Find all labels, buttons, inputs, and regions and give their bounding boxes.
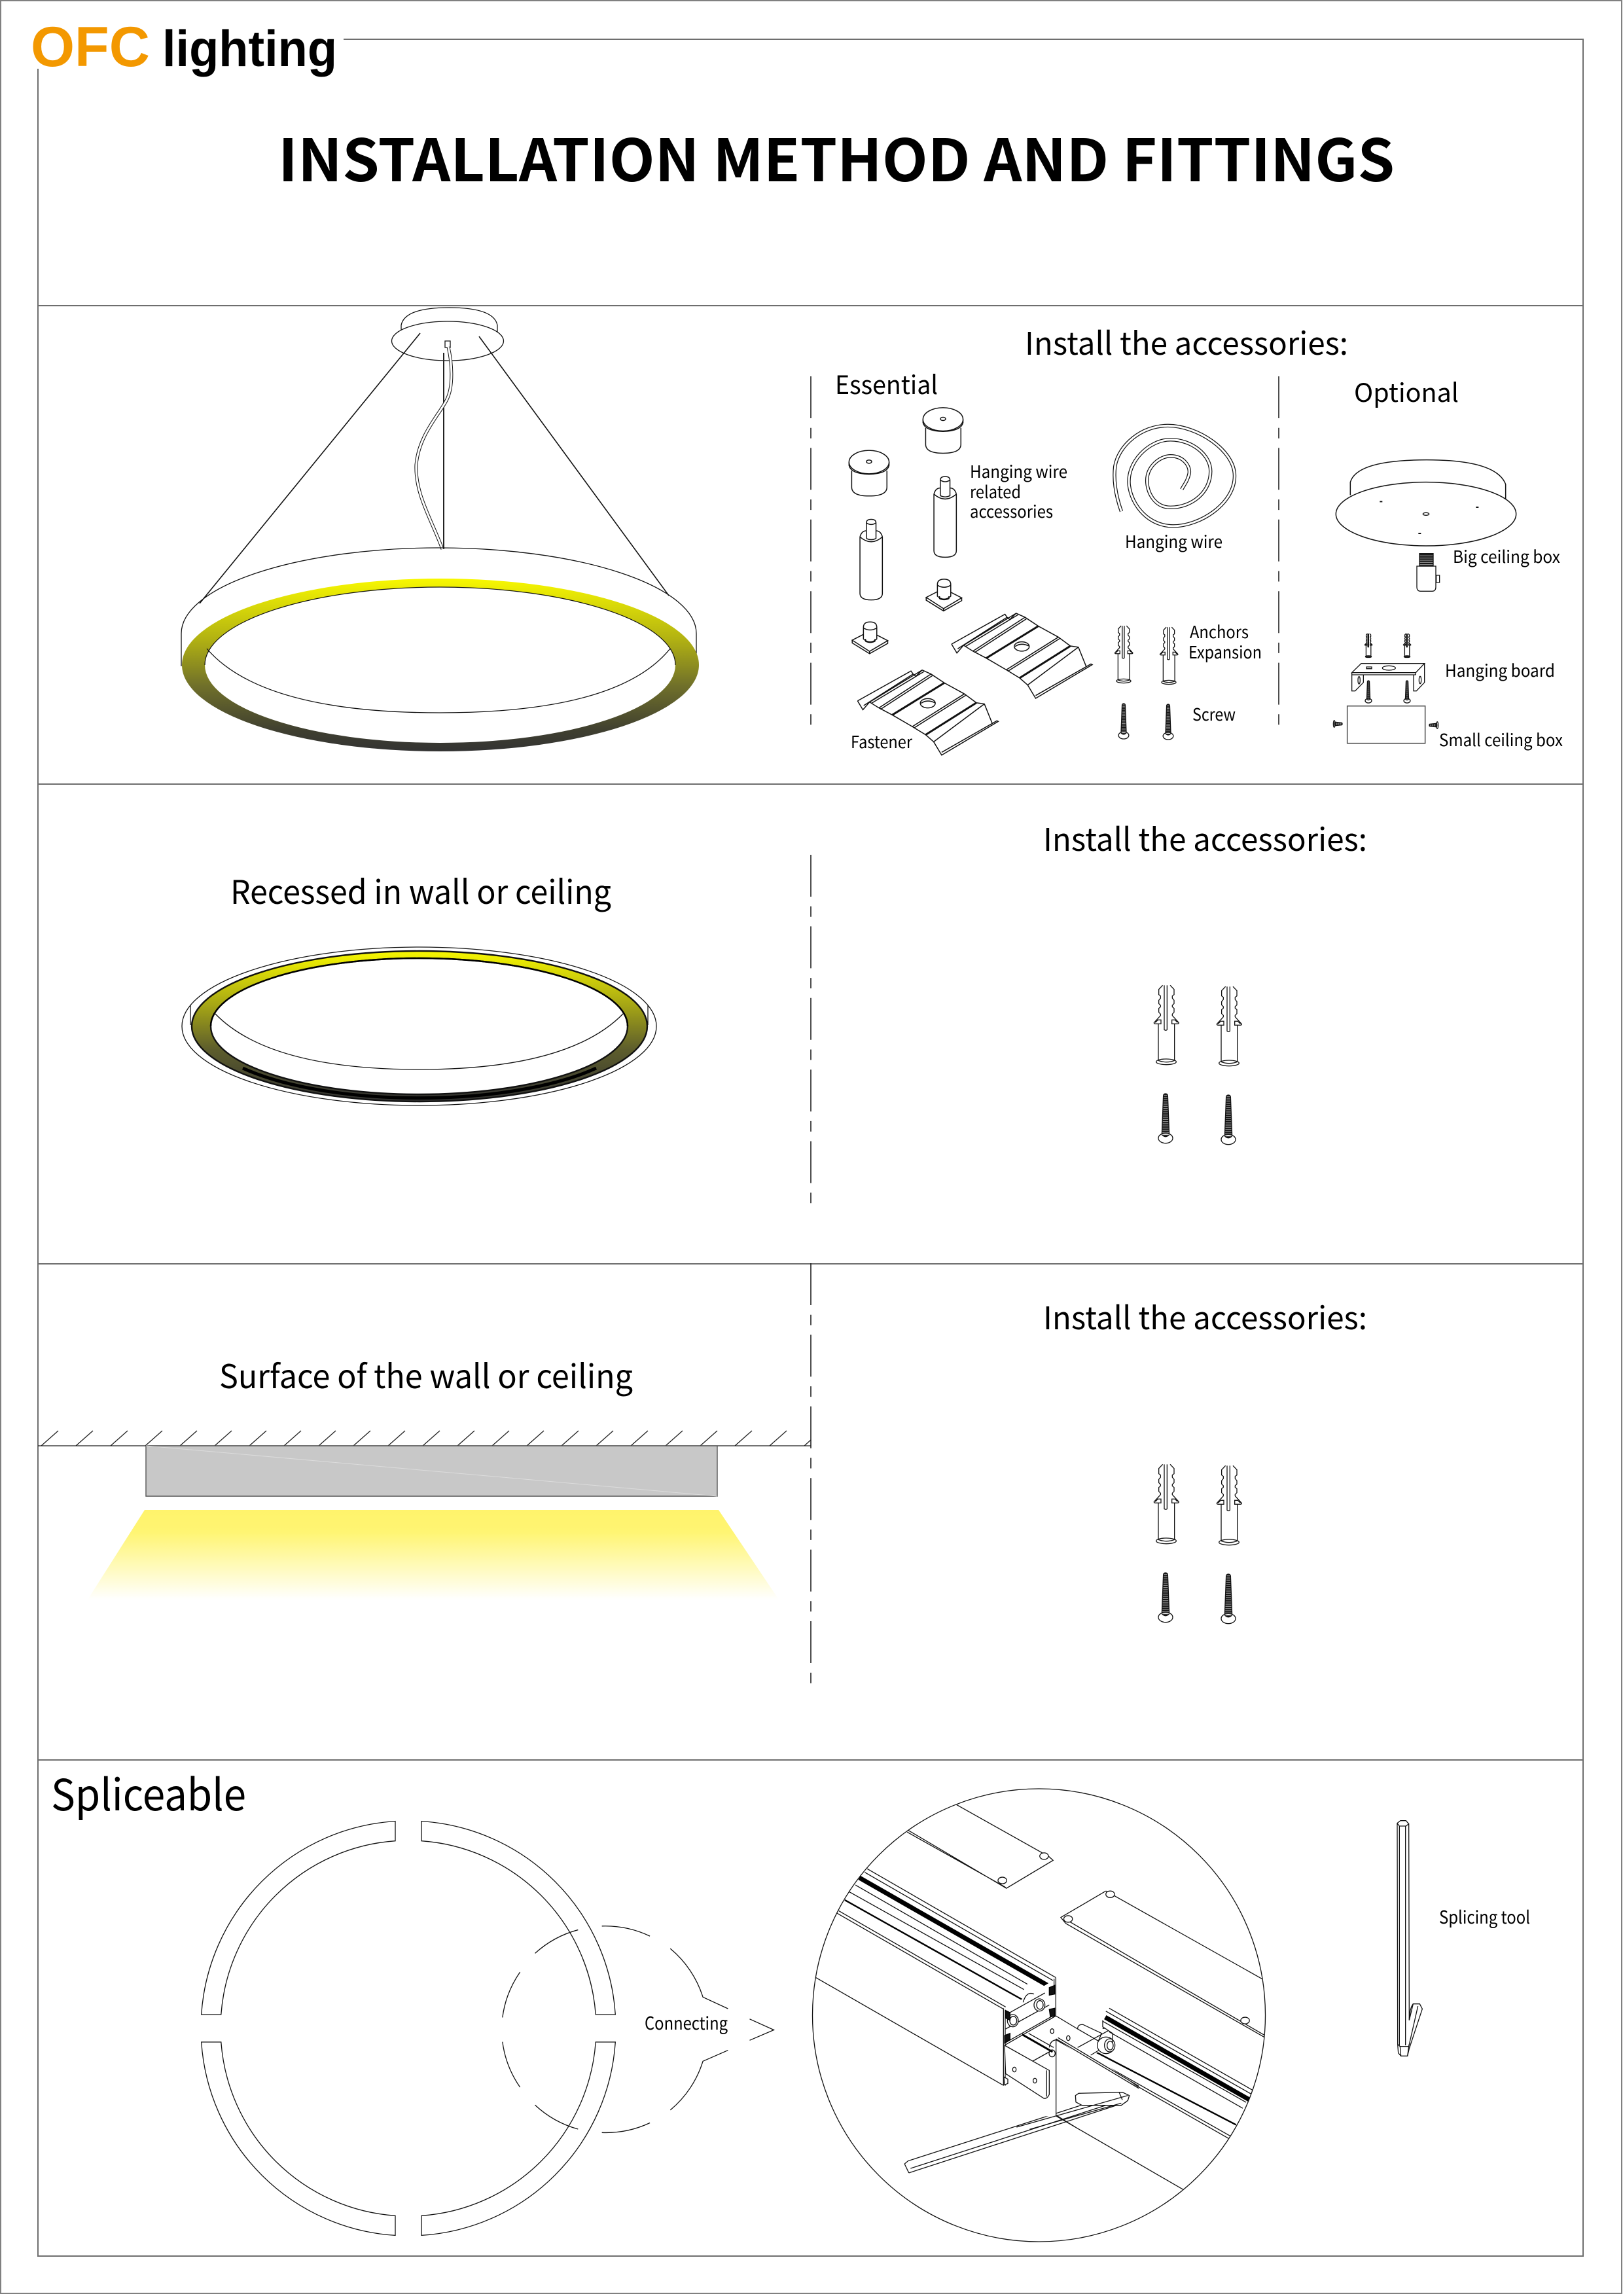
icon: ceiling caps xyxy=(849,408,963,496)
label: Hanging wire xyxy=(970,459,1067,483)
inner ring edge xyxy=(207,649,670,713)
icon: big ceiling box xyxy=(1336,460,1516,546)
label: related xyxy=(970,479,1021,503)
suspension wires xyxy=(200,333,669,603)
ring light band xyxy=(182,579,699,751)
ceiling hatch xyxy=(38,1431,811,1446)
logo: lighting xyxy=(162,20,337,77)
icon: hanging wire coil xyxy=(1115,425,1234,526)
icon: hanging board xyxy=(1352,664,1425,691)
label: Small ceiling box xyxy=(1439,727,1563,751)
label: Hanging board xyxy=(1445,658,1555,682)
icon: small anchors xyxy=(1115,626,1178,685)
heading: Install the accessories: xyxy=(1043,814,1367,860)
icon: small ceiling box xyxy=(1347,706,1425,744)
detail: bracket, bolts and plates xyxy=(1003,1978,1139,2129)
icon: square studs xyxy=(852,579,962,654)
logo xyxy=(31,16,337,79)
label: Splicing tool xyxy=(1439,1903,1530,1929)
heading: Install the accessories: xyxy=(1043,1293,1367,1338)
icon: board anchors and screws xyxy=(1333,634,1438,728)
icon: wire gripper xyxy=(1417,554,1440,591)
divider xyxy=(811,376,1279,725)
icon: small screws xyxy=(1118,704,1173,740)
icon: screws xyxy=(1158,1094,1236,1145)
icons: essential accessories xyxy=(849,408,1234,755)
label: Anchors xyxy=(1190,619,1249,643)
heading: Surface of the wall or ceiling xyxy=(219,1351,633,1398)
logo: OFC xyxy=(31,16,150,79)
panel: pendant installation xyxy=(181,308,1563,755)
callout: dashed connector lens xyxy=(503,1926,774,2132)
light beam xyxy=(88,1510,779,1600)
ring body xyxy=(181,548,696,666)
panel: recessed installation xyxy=(182,814,1367,1204)
icons: optional accessories xyxy=(1336,460,1516,744)
label xyxy=(970,459,1067,523)
label: Screw xyxy=(1192,702,1236,726)
panel: spliceable xyxy=(51,1761,1530,2242)
label xyxy=(1188,619,1262,664)
label: Connecting xyxy=(645,2009,728,2035)
label: Big ceiling box xyxy=(1453,544,1560,568)
heading: essential: Essential xyxy=(835,365,938,402)
illustration: recessed ring lamp xyxy=(182,947,656,1105)
divider xyxy=(810,1263,812,1683)
icon: anchors xyxy=(1154,985,1241,1066)
illustration: pendant ring lamp xyxy=(181,308,699,751)
ceiling canopy xyxy=(391,308,504,361)
heading: Install the accessories: xyxy=(1025,318,1348,364)
illustration: connection detail xyxy=(806,1789,1266,2242)
label: Expansion xyxy=(1188,639,1262,664)
title: INSTALLATION METHOD AND FITTINGS xyxy=(278,114,1395,198)
centre rod xyxy=(443,353,444,549)
divider xyxy=(810,855,812,1204)
icon: fasteners xyxy=(857,613,1092,755)
icon: splicing tool xyxy=(1397,1821,1422,2056)
icon: anchors xyxy=(1154,1464,1241,1545)
panel: header xyxy=(31,16,1395,198)
icon: screws xyxy=(1158,1573,1236,1624)
label: Fastener xyxy=(851,729,913,753)
icon: hanging posts xyxy=(860,476,956,600)
panel: surface mounted installation xyxy=(38,1263,1367,1683)
heading: Recessed in wall or ceiling xyxy=(230,867,611,914)
heading: Spliceable xyxy=(51,1761,246,1823)
heading: optional: Optional xyxy=(1354,373,1459,410)
power cable xyxy=(416,341,452,549)
label: accessories xyxy=(970,499,1053,523)
illustration: ring segments xyxy=(202,1821,615,2235)
label: Hanging wire xyxy=(1125,529,1222,553)
surface mounted lamp body xyxy=(146,1446,717,1496)
